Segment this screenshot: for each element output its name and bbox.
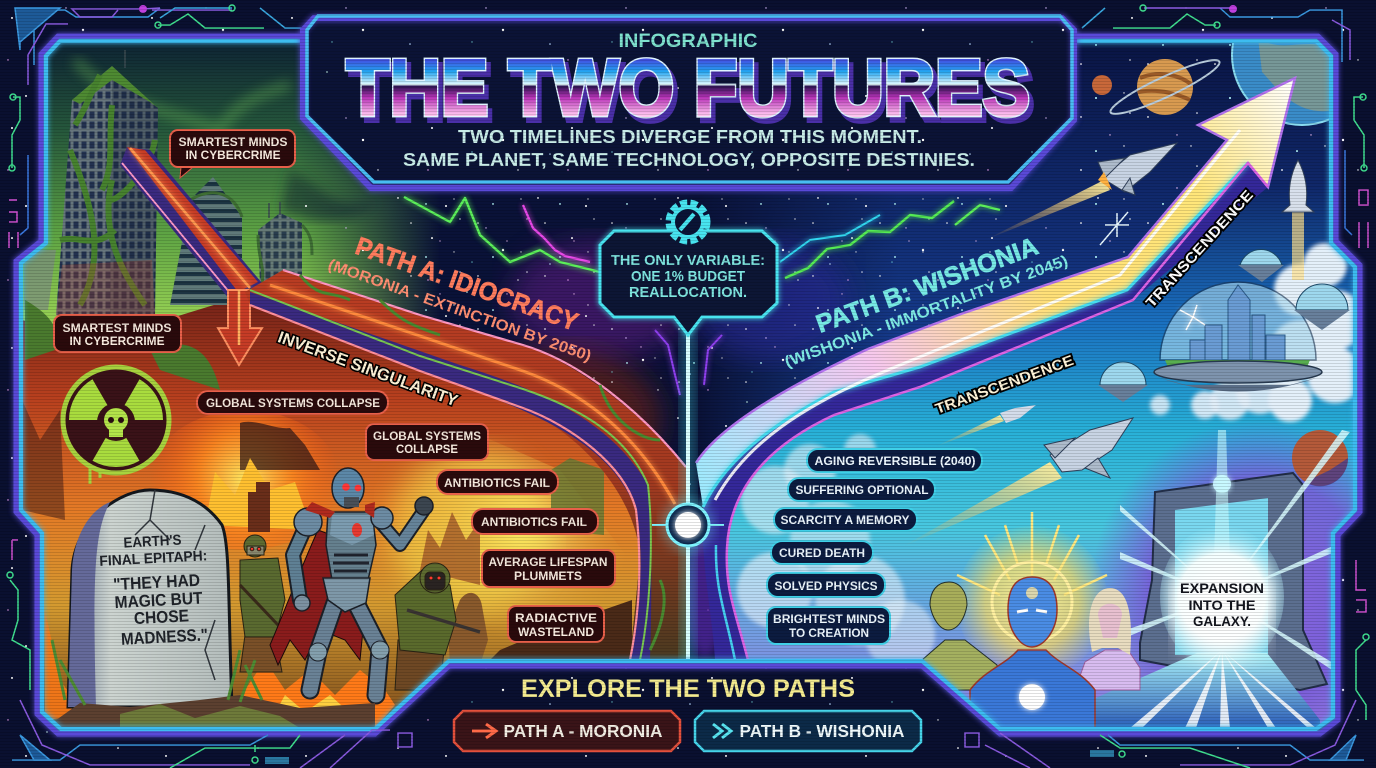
- callout: smartest minds speech bubble: IN CYBERCRIME: [186, 148, 280, 162]
- callout: radioactive wasteland: [508, 606, 604, 642]
- illustration: explosion and city ruins: [205, 422, 632, 660]
- callout: antibiotics fail one: [437, 470, 558, 494]
- explore the two paths panel: [454, 675, 921, 751]
- central space background: [305, 142, 1099, 659]
- illustration: domed cities: [1098, 250, 1350, 402]
- bottom navigation bar: [375, 660, 1000, 768]
- circuit decoration: top left: [9, 5, 302, 248]
- illustration: transcended post-human figures: [922, 512, 1140, 728]
- callout: the only variable: [600, 203, 777, 335]
- epitaph text: FINAL EPITAPH:: [99, 548, 208, 570]
- illustration: ringed planet, small planet and Earth: [1092, 43, 1329, 246]
- callout: smartest minds speech bubble: SMARTEST MINDS: [178, 135, 288, 149]
- callout text: ONE 1% BUDGET: [631, 268, 745, 285]
- central divergence line and node: [652, 330, 724, 665]
- button: Path A: [454, 711, 680, 751]
- panel: left toxic sky: [23, 43, 434, 324]
- epitaph text: EARTH'S: [123, 533, 182, 552]
- callout: solved physics: SOLVED PHYSICS: [774, 579, 878, 593]
- callout: smartest minds: IN CYBERCRIME: [70, 334, 164, 348]
- subtitle: TWO TIMELINES DIVERGE FROM THIS MOMENT.: [458, 126, 922, 147]
- epitaph text: "THEY HAD: [113, 571, 201, 594]
- portal label: EXPANSION: [1180, 580, 1264, 596]
- illustration: rubble mound and grass: [45, 640, 375, 728]
- callout: smartest minds: SMARTEST MINDS: [62, 321, 172, 335]
- button: Path B: PATH B - WISHONIA: [740, 721, 905, 741]
- callout: brightest minds: [767, 607, 890, 644]
- arrow: Path A curved descending band: [245, 270, 686, 660]
- heading: Path A: (MORONIA - EXTINCTION BY 2050): [326, 256, 593, 365]
- callout text: THE ONLY VARIABLE:: [611, 252, 765, 269]
- tombstone with epitaph: [68, 490, 232, 707]
- illustration: ruined overgrown towers: [24, 50, 312, 390]
- epitaph text: MAGIC BUT: [114, 589, 204, 612]
- callout: antibiotics fail two: [472, 509, 598, 534]
- callout text: REALLOCATION.: [629, 284, 747, 301]
- icon: radiation warning sign: [63, 367, 169, 484]
- callout: global systems collapse wide: GLOBAL SYSTEMS COLLAPSE: [206, 396, 380, 410]
- icon: gear and wrench: [669, 203, 707, 241]
- circuit decoration: bottom right: [965, 560, 1369, 768]
- button: Path A: PATH A - MORONIA: [504, 721, 663, 741]
- callout: average lifespan plummets: PLUMMETS: [514, 569, 582, 583]
- label: transcendence on arrow head: TRANSCENDENCE: [1143, 187, 1257, 311]
- illustration: soldiers: [240, 535, 488, 690]
- panel: right deep space: [714, 43, 1329, 438]
- lightning arcs: [404, 197, 1000, 395]
- callout: average lifespan plummets: AVERAGE LIFESPAN: [488, 555, 608, 569]
- circuit decoration: bottom left: [7, 540, 412, 768]
- callout: suffering optional: [788, 478, 935, 501]
- label: inverse singularity: INVERSE SINGULARITY: [275, 328, 460, 410]
- panel: left side callouts: [54, 130, 615, 642]
- callout: average lifespan plummets: [482, 550, 615, 587]
- title: the two futures: THE TWO FUTURES: [346, 43, 1030, 132]
- heading: Path B: PATH B: WISHONIA: [813, 232, 1042, 339]
- arrow: Path A descending branch: [120, 147, 262, 365]
- epitaph text: [100, 534, 207, 645]
- portal floor: [1096, 652, 1320, 727]
- panel: right sky below the ascending path: [727, 163, 1354, 730]
- epitaph text: MADNESS.": [121, 625, 208, 649]
- callout: antibiotics fail two: ANTIBIOTICS FAIL: [481, 515, 587, 529]
- callout: aging reversible: AGING REVERSIBLE (2040): [814, 454, 976, 468]
- callout: global systems collapse two-line: COLLAPSE: [396, 442, 458, 456]
- illustration: flames: [45, 610, 395, 728]
- portal label: GALAXY.: [1193, 613, 1251, 629]
- heading: Path B: (WISHONIA - IMMORTALITY BY 2045): [783, 252, 1070, 371]
- callout: global systems collapse two-line: GLOBAL SYSTEMS: [373, 429, 481, 443]
- heading: explore the two paths: EXPLORE THE TWO PATHS: [521, 675, 855, 703]
- callout: global systems collapse wide: [197, 391, 388, 414]
- circuit decoration: top right: [1082, 5, 1368, 248]
- callout: brightest minds: BRIGHTEST MINDS: [773, 612, 885, 626]
- title: the two futures: THE TWO FUTURES: [346, 43, 1030, 132]
- callout: scarcity a memory: [774, 508, 917, 531]
- title: the two futures: THE TWO FUTURES: [350, 48, 1034, 137]
- callout: suffering optional: SUFFERING OPTIONAL: [796, 483, 928, 497]
- panel: right side callouts: [767, 449, 982, 644]
- button: Path B: [695, 711, 921, 751]
- callout: radioactive wasteland: RADIACTIVE: [515, 611, 597, 625]
- illustration: glowing portal gate: [1096, 430, 1350, 727]
- clouds: [737, 243, 1365, 670]
- callout: scarcity a memory: SCARCITY A MEMORY: [780, 513, 910, 527]
- arrow: Path B ascending band: [696, 78, 1295, 660]
- callout: global systems collapse two-line: [366, 424, 488, 460]
- callout: radioactive wasteland: WASTELAND: [518, 625, 594, 639]
- portal label: [1180, 584, 1263, 626]
- callout: aging reversible: [807, 449, 982, 472]
- subtitle: [403, 126, 975, 170]
- subtitle: SAME PLANET, SAME TECHNOLOGY, OPPOSITE DESTINIES.: [403, 149, 975, 170]
- callout: cured death: [771, 541, 873, 564]
- portal label: INTO THE: [1188, 597, 1256, 613]
- illustration: flying rockets: [902, 143, 1314, 547]
- panel: left burning wasteland ground: [22, 300, 640, 728]
- callout: brightest minds: TO CREATION: [789, 626, 869, 640]
- callout: antibiotics fail one: ANTIBIOTICS FAIL: [444, 476, 550, 490]
- callout: solved physics: [767, 573, 885, 597]
- illustration: armored robot with cape: [270, 468, 433, 695]
- title panel: [303, 16, 1074, 188]
- callout: smartest minds: [54, 315, 181, 352]
- callout: smartest minds speech bubble: [170, 130, 295, 178]
- heading: Path A: PATH A: IDIOCRACY: [352, 232, 582, 337]
- label: transcendence on band: TRANSCENDENCE: [933, 353, 1076, 418]
- callout: cured death: CURED DEATH: [779, 546, 865, 560]
- epitaph text: CHOSE: [133, 606, 189, 628]
- callout box: [600, 231, 777, 335]
- illustration: distant red planet: [1292, 430, 1348, 486]
- callout text: [611, 252, 765, 301]
- eyebrow: infographic: INFOGRAPHIC: [618, 31, 758, 52]
